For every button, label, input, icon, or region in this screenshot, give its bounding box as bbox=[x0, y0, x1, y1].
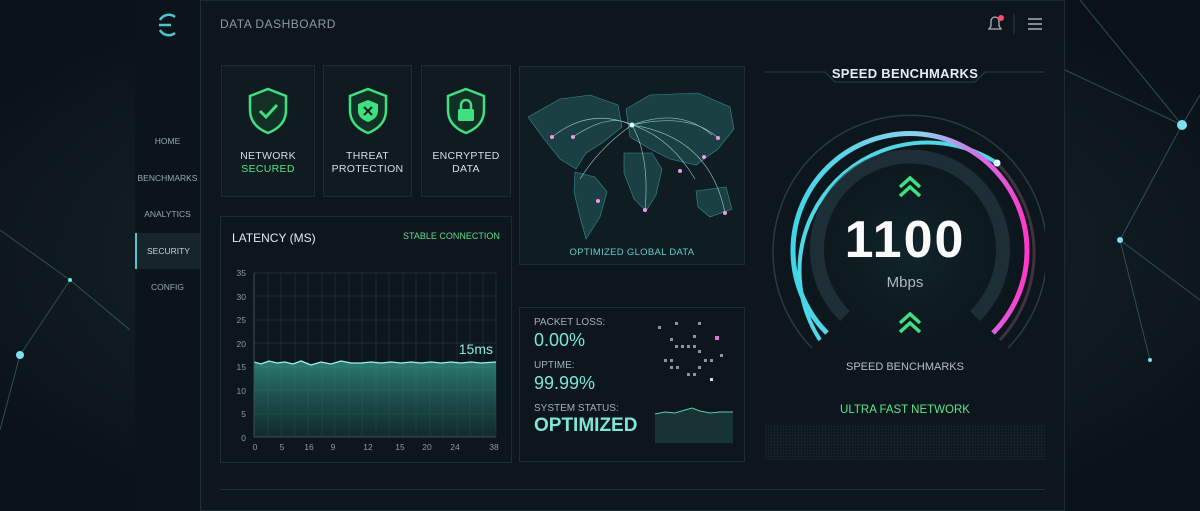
panel: system stats: PACKET LOSS: bbox=[534, 317, 605, 328]
dot matrix and sparkline bbox=[654, 322, 733, 443]
panel: speed gauge: SPEED BENCHMARKS bbox=[832, 66, 978, 81]
nav menu: ANALYTICS bbox=[144, 209, 191, 219]
gauge label: SPEED BENCHMARKS bbox=[846, 361, 964, 373]
card: threat protection: THREAT bbox=[346, 150, 389, 162]
line chart: 10 bbox=[237, 386, 246, 396]
dashboard frame bbox=[135, 0, 1065, 511]
panel: speed gauge bbox=[765, 66, 1045, 460]
header icons bbox=[988, 14, 1042, 34]
line chart bbox=[236, 268, 499, 452]
line chart: 15 bbox=[237, 362, 246, 372]
panel: global map bbox=[519, 66, 745, 265]
nav menu: BENCHMARKS bbox=[138, 172, 197, 182]
line chart: 24 bbox=[450, 442, 460, 452]
line chart: 15 bbox=[395, 442, 405, 452]
line chart: 30 bbox=[237, 292, 246, 302]
line chart: 20 bbox=[237, 339, 246, 349]
gauge bbox=[772, 114, 1045, 348]
line chart: 35 bbox=[237, 268, 246, 278]
line chart: 0 bbox=[253, 442, 258, 452]
security cards bbox=[221, 65, 511, 197]
nav menu: CONFIG bbox=[151, 282, 184, 292]
line chart: 20 bbox=[422, 442, 432, 452]
line chart: 5 bbox=[241, 409, 246, 419]
panel: system stats: SYSTEM STATUS: bbox=[534, 403, 619, 414]
card: network secured: SECURED bbox=[241, 163, 295, 175]
line chart: 15ms bbox=[459, 341, 493, 357]
speed value: 1100 bbox=[845, 211, 965, 269]
header title: DATA DASHBOARD bbox=[220, 17, 336, 31]
card: encrypted data: ENCRYPTED bbox=[432, 150, 500, 162]
card: network secured bbox=[221, 65, 315, 197]
panel: latency chart bbox=[220, 216, 512, 463]
nav menu: SECURITY bbox=[147, 246, 190, 256]
line chart: 25 bbox=[237, 315, 246, 325]
sidebar bbox=[135, 0, 201, 511]
line chart: 16 bbox=[304, 442, 314, 452]
panel: global map: OPTIMIZED GLOBAL DATA bbox=[570, 247, 694, 258]
panel: system stats: UPTIME: bbox=[534, 360, 575, 371]
line chart: 12 bbox=[363, 442, 373, 452]
line chart: 9 bbox=[331, 442, 336, 452]
panel: system stats: 99.99% bbox=[534, 373, 595, 393]
line chart: 5 bbox=[280, 442, 285, 452]
card: encrypted data bbox=[421, 65, 511, 197]
panel: speed gauge: Mbps bbox=[887, 274, 923, 291]
panel: system stats: OPTIMIZED bbox=[534, 415, 637, 436]
card: threat protection bbox=[323, 65, 412, 197]
status: ULTRA FAST NETWORK bbox=[840, 404, 970, 416]
panel: system stats bbox=[519, 307, 745, 462]
line chart: 0 bbox=[241, 433, 246, 443]
heading bbox=[765, 72, 1045, 82]
heading: LATENCY (MS) bbox=[232, 231, 316, 245]
card: network secured: NETWORK bbox=[240, 150, 296, 162]
panel: system stats: 0.00% bbox=[534, 330, 585, 350]
card: encrypted data: DATA bbox=[452, 163, 480, 175]
nav menu bbox=[135, 136, 200, 292]
status label: STABLE CONNECTION bbox=[403, 231, 500, 241]
nav menu: HOME bbox=[155, 136, 180, 146]
line chart: 38 bbox=[489, 442, 499, 452]
logo icon bbox=[159, 14, 176, 36]
card: threat protection: PROTECTION bbox=[332, 163, 403, 175]
